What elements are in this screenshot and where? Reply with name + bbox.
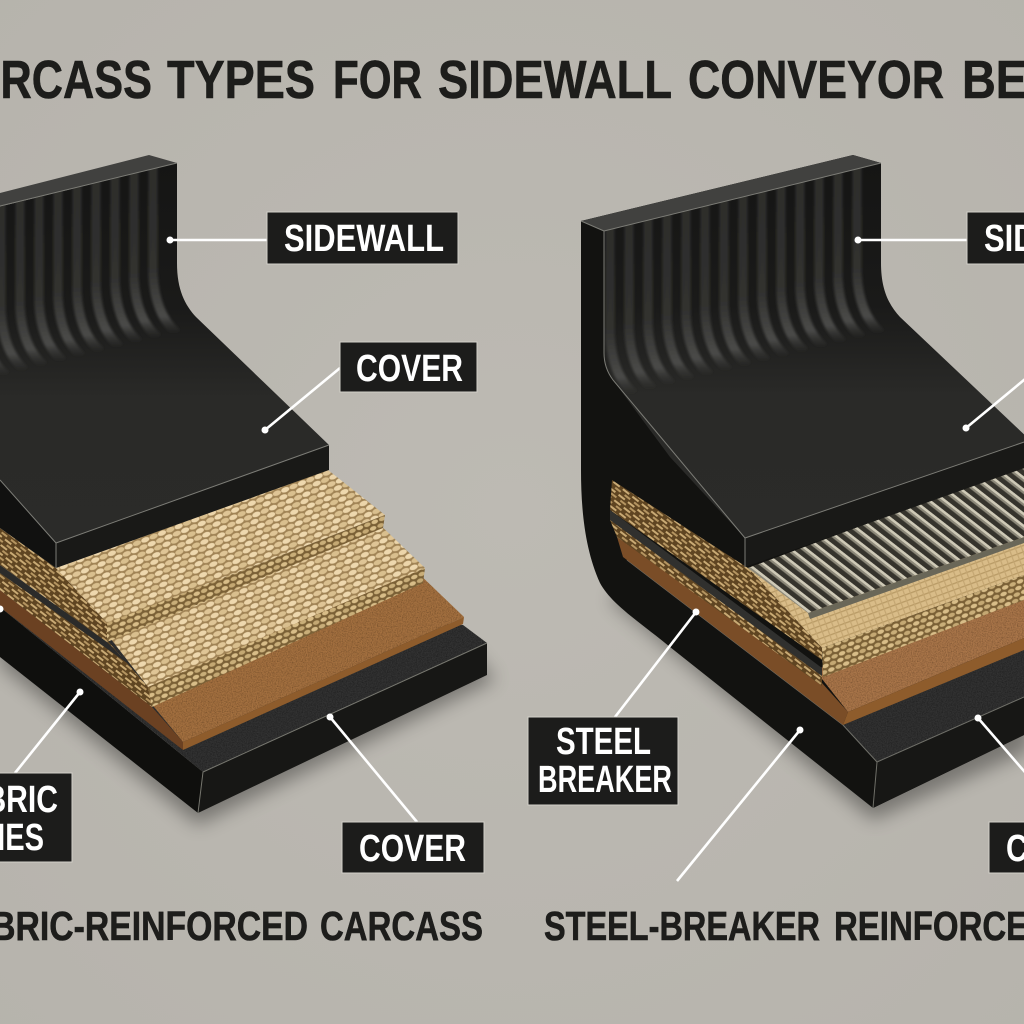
cover with sidewall (581, 155, 1024, 567)
upper fabric ply (0, 470, 385, 642)
title: SIDEWALL (438, 50, 672, 110)
panel: steel-breaker belt (581, 155, 1024, 820)
bottom cover (627, 560, 1024, 808)
label: cover bottom right (974, 714, 1024, 873)
label: fabric plies (0, 606, 84, 862)
title: TYPES (167, 50, 315, 110)
cover with sidewall (0, 155, 329, 568)
leader: housing (677, 726, 804, 881)
title: FOR (333, 50, 422, 110)
lower fabric ply (0, 520, 425, 707)
dark strip (0, 565, 130, 665)
title (0, 50, 1024, 110)
brown layer (617, 537, 1024, 725)
label: cover top left: COVER (356, 348, 463, 390)
sidewall ribs (610, 165, 881, 394)
title: CONVEYOR (688, 50, 944, 110)
fabric ply (610, 470, 1024, 686)
bottom cover (0, 600, 487, 813)
caption: fabric-reinforced carcass: CARCASS (320, 903, 483, 949)
housing (581, 155, 1024, 808)
label: steel breaker: BREAKER (538, 759, 672, 801)
label: steel breaker (528, 608, 700, 805)
label: sidewall right (854, 212, 1024, 264)
label: sidewall left (166, 212, 458, 264)
label: cover bottom left: COVER (359, 828, 466, 870)
label: cover bottom left (326, 714, 484, 873)
label: cover top left (262, 342, 477, 434)
steel breaker (748, 465, 1024, 619)
panel: fabric-reinforced belt (0, 155, 495, 825)
leader: cover top right (962, 375, 1024, 432)
brown layer (0, 570, 464, 750)
caption: steel-breaker reinforced carcass: STEEL-BREAKER (544, 903, 820, 949)
label: sidewall left: SIDEWALL (284, 218, 444, 260)
label: steel breaker: STEEL (556, 721, 651, 763)
sidewall ribs (0, 168, 176, 370)
